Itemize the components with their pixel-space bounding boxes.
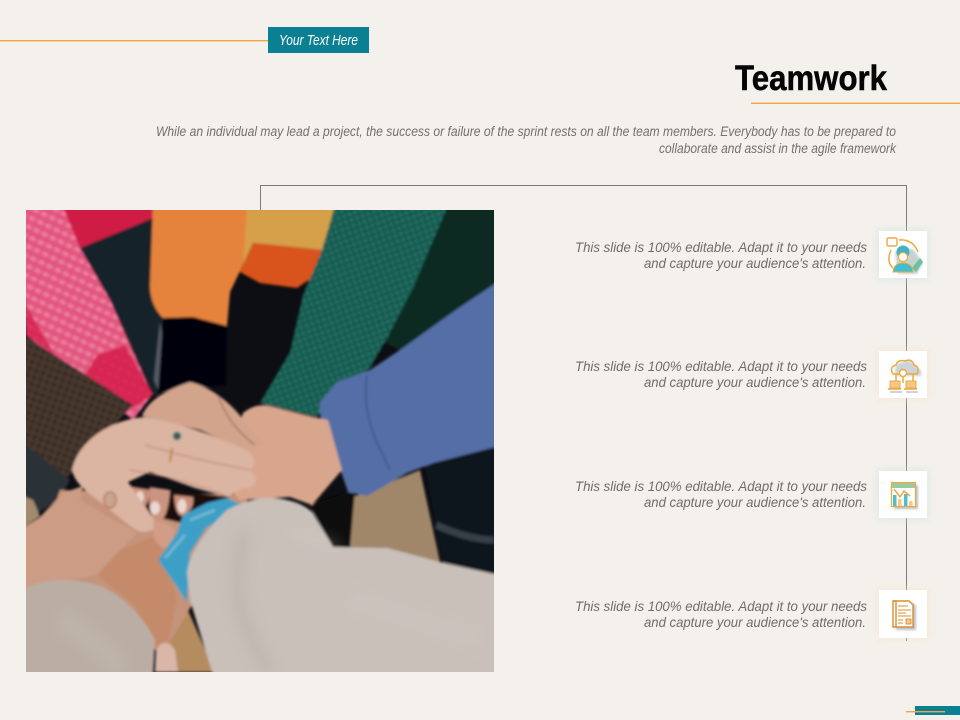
mustard sleeve <box>243 205 337 265</box>
small knuckle <box>152 522 174 546</box>
photo: stacked hands <box>20 205 499 675</box>
skin base between hands <box>55 488 249 645</box>
center arm <box>97 537 177 650</box>
list item 4 text: and capture your audience's attention. <box>644 614 866 630</box>
blue knit sleeve <box>320 281 499 496</box>
tag: Your Text Here <box>268 27 369 53</box>
icon card 2: cloud network <box>877 349 929 400</box>
orange sleeve <box>150 205 248 326</box>
footer accent <box>906 706 960 715</box>
icon card 1: support agent <box>877 229 929 280</box>
black cuff <box>158 317 227 392</box>
header accent line <box>0 40 268 41</box>
teal knit sleeve <box>260 205 448 417</box>
pink knit sleeve <box>20 205 152 420</box>
right hand <box>220 405 342 505</box>
rings <box>172 431 182 441</box>
list item 3 text: and capture your audience's attention. <box>644 494 866 510</box>
center dark <box>310 490 355 548</box>
finger nails <box>136 491 144 503</box>
blue scrunchie <box>158 498 247 603</box>
brown knit sleeve <box>20 333 133 482</box>
list item 4 text <box>575 598 867 630</box>
intro text <box>156 124 897 156</box>
orange-red cuff <box>240 243 322 288</box>
list item 2 text <box>575 358 867 390</box>
finger at bottom <box>155 642 178 672</box>
red cuff edge <box>85 345 153 408</box>
list item 2 text: and capture your audience's attention. <box>644 374 866 390</box>
sleeve folds <box>326 532 344 547</box>
list item 2 text: This slide is 100% editable. Adapt it to your needs <box>575 358 867 374</box>
finger lines <box>130 445 250 497</box>
red sleeve <box>60 208 153 248</box>
coat highlight <box>154 322 164 392</box>
back hand <box>140 380 243 446</box>
right dark area <box>425 440 499 575</box>
bottom beige <box>167 608 215 672</box>
tag: Your Text Here: Your Text Here <box>279 33 358 49</box>
icon card 3: analytics chart <box>877 469 929 520</box>
left dark area <box>26 444 70 513</box>
list item 3 text <box>575 478 867 510</box>
beige fur <box>350 470 440 562</box>
red left edge <box>26 305 55 355</box>
icon card 4: document <box>877 588 929 640</box>
finger tips <box>132 487 150 510</box>
list item 1 text: This slide is 100% editable. Adapt it to your needs <box>575 239 867 255</box>
title: Teamwork <box>735 59 887 98</box>
dark green background <box>384 210 494 351</box>
left hand <box>20 486 137 590</box>
intro text: While an individual may lead a project, the success or failure of the sprint rests on all the team members. Everybody has to be prepared to <box>156 124 896 139</box>
list item 4 text: This slide is 100% editable. Adapt it to your needs <box>575 598 867 614</box>
intro text: collaborate and assist in the agile framework <box>659 141 897 156</box>
grey streak <box>436 525 494 540</box>
connector frame <box>260 186 906 641</box>
top ring hand <box>72 417 256 532</box>
sleeve cuff fold <box>366 375 390 470</box>
under fingers shadow <box>125 485 230 525</box>
navy coat <box>70 212 166 395</box>
list item 3 text: This slide is 100% editable. Adapt it to your needs <box>575 478 867 494</box>
title underline <box>751 103 960 104</box>
left grey sleeve <box>20 580 155 675</box>
list item 1 text: and capture your audience's attention. <box>644 255 866 271</box>
large white sleeve <box>187 498 499 675</box>
list item 1 text <box>575 239 867 271</box>
